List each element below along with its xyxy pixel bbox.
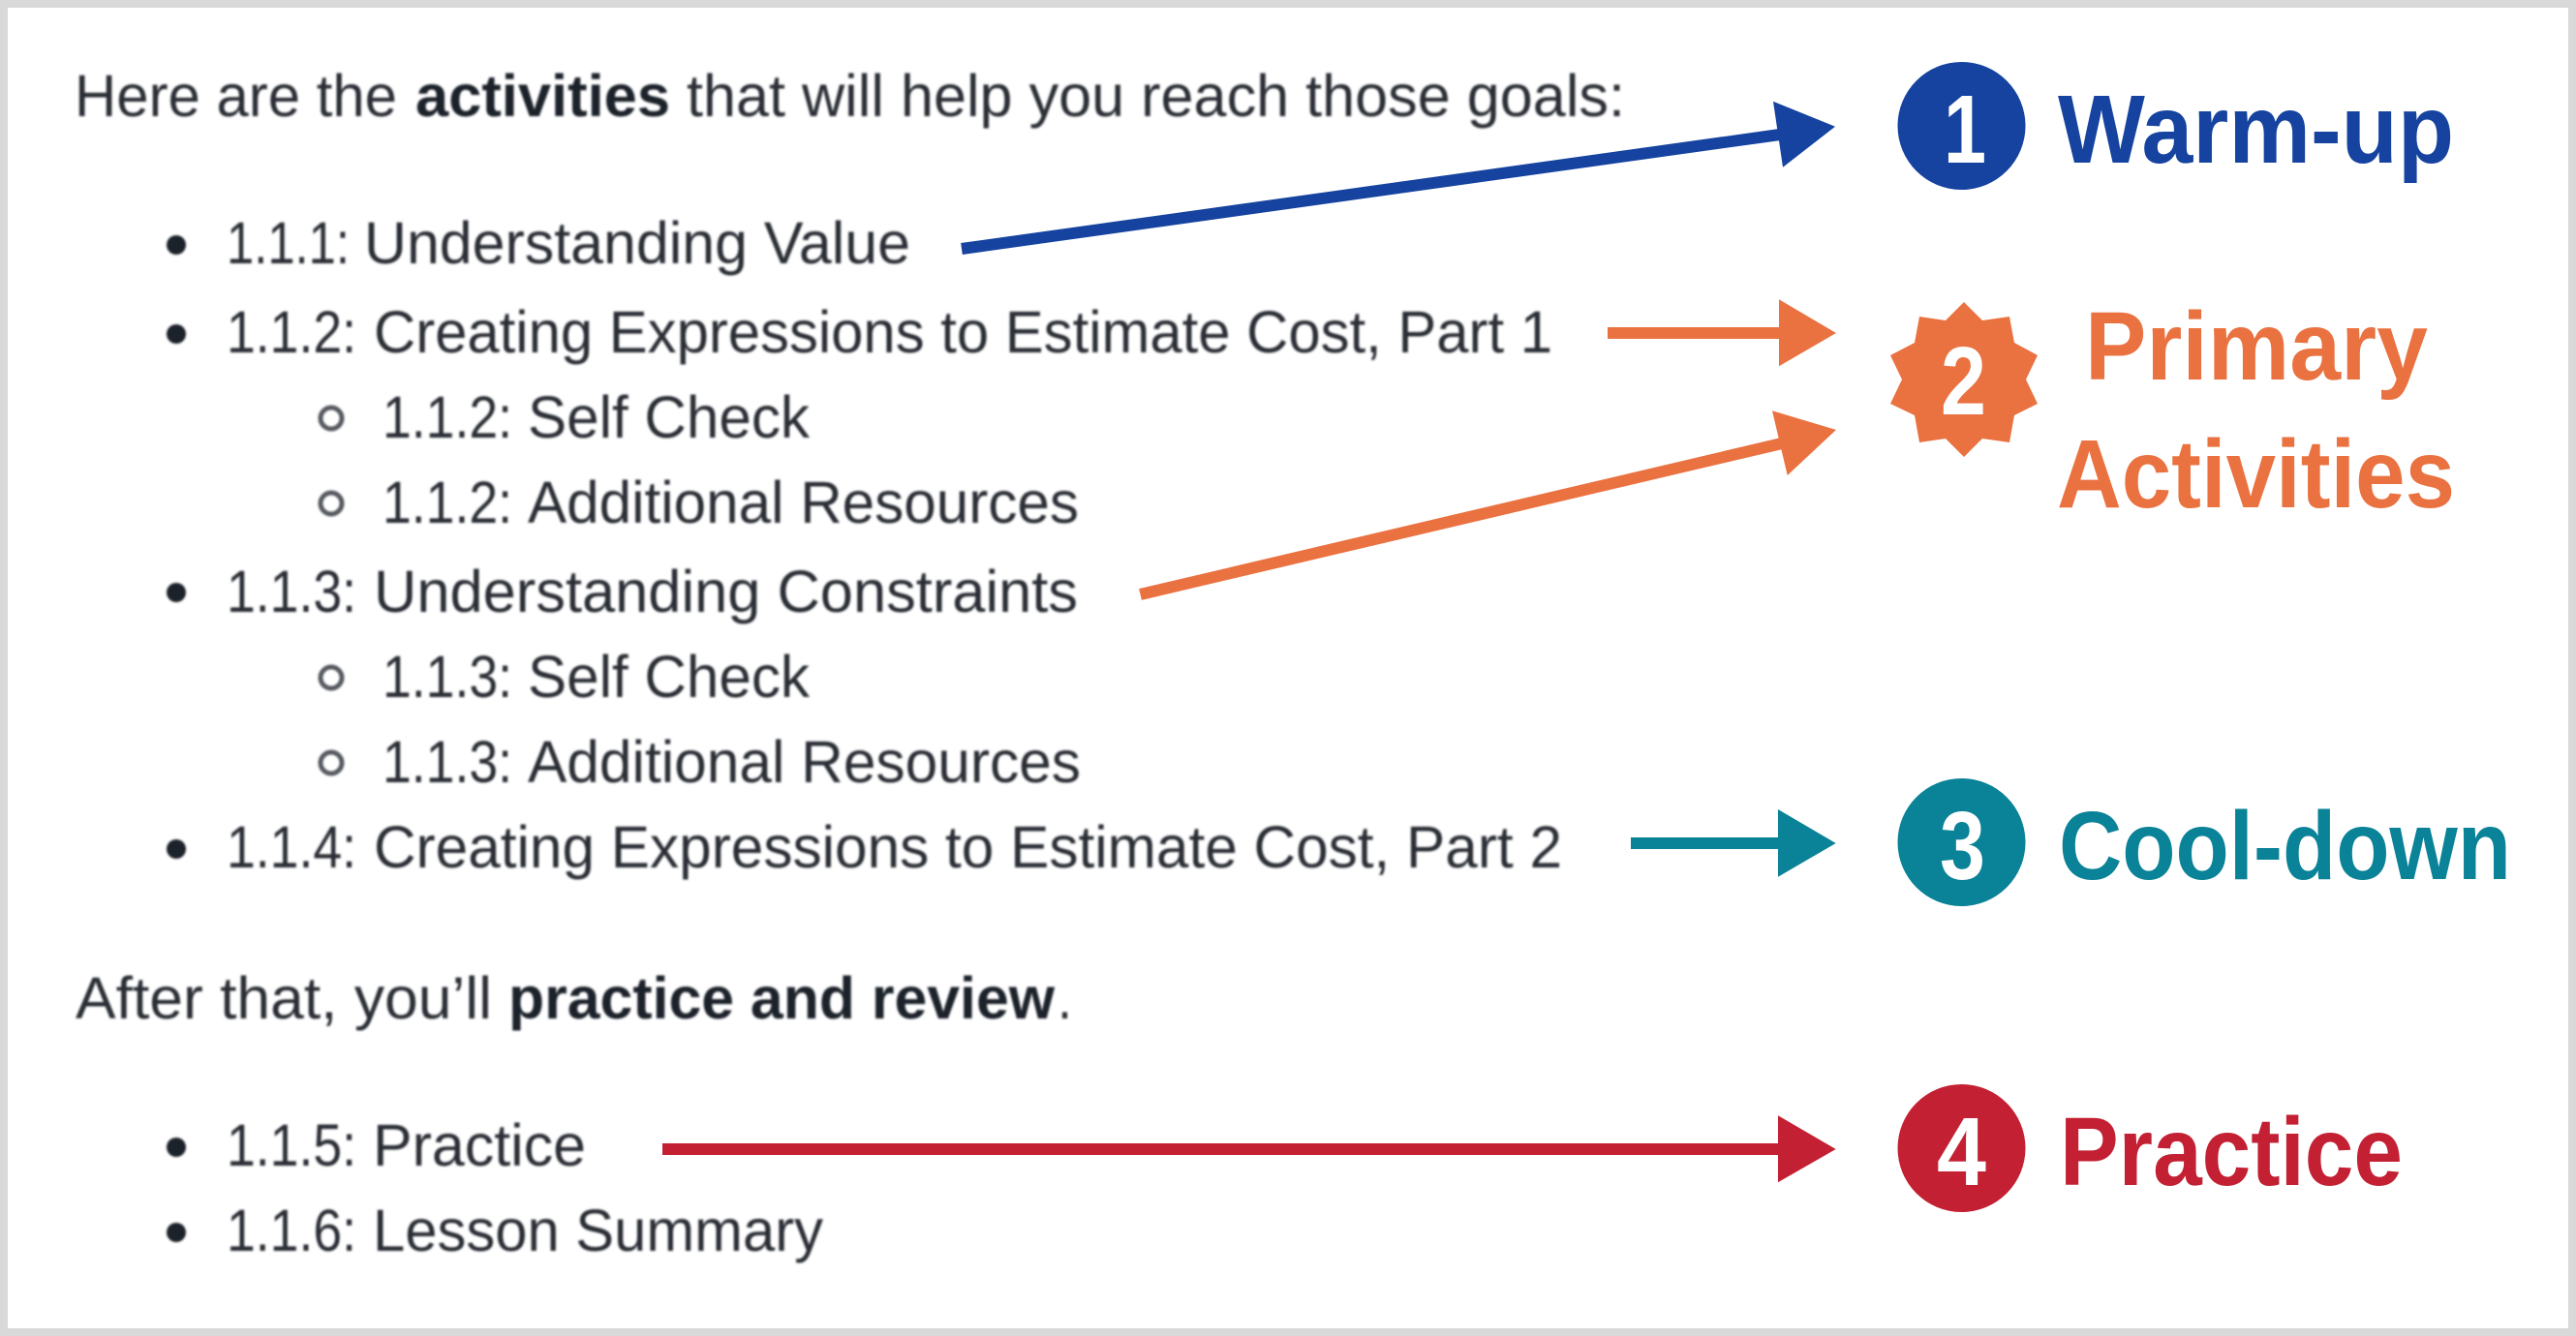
item 1.1.2: 1.1.2:	[227, 299, 356, 365]
item 1.1.6: 1.1.6:	[227, 1198, 356, 1263]
item 1.1.3 self check: Self Check	[528, 644, 810, 710]
item 1.1.3 self check	[321, 644, 810, 710]
arrow: 1.1.5 to practice	[662, 1115, 1836, 1182]
arrow: 1.1.1 to warm-up	[962, 102, 1835, 249]
item 1.1.3 additional resources: Additional Resources	[528, 729, 1081, 795]
item 1.1.1: 1.1.1:	[227, 210, 350, 276]
icon: number 1 circle	[1898, 62, 2026, 190]
item 1.1.6: Lesson Summary	[373, 1198, 823, 1263]
item 1.1.2: Creating Expressions to Estimate Cost, Part 1	[374, 299, 1552, 365]
item 1.1.2 additional resources: 1.1.2:	[383, 470, 512, 535]
item 1.1.5: 1.1.5:	[227, 1112, 356, 1178]
lesson activity text	[75, 63, 1625, 1263]
icon: number 3 circle: 3	[1940, 792, 1985, 900]
item 1.1.1: Understanding Value	[364, 210, 910, 276]
step 1: warm-up	[1898, 62, 2454, 190]
step 3: cool-down	[1898, 778, 2511, 906]
icon: number 4 circle: 4	[1937, 1098, 1986, 1206]
item 1.1.2 additional resources: Additional Resources	[528, 470, 1079, 535]
item 1.1.2 self check: 1.1.2:	[383, 384, 512, 450]
item 1.1.5: Practice	[373, 1112, 586, 1178]
item 1.1.5	[167, 1112, 586, 1178]
icon: number 1 circle: 1	[1944, 76, 1986, 184]
item 1.1.3: 1.1.3:	[227, 559, 356, 624]
practice sentence: practice and review	[508, 965, 1056, 1031]
icon: number 3 circle	[1898, 778, 2026, 906]
practice list	[167, 1112, 823, 1263]
label: cool-down: Cool-down	[2059, 792, 2511, 900]
icon: number 2 starburst: 2	[1941, 327, 1986, 436]
activity list	[167, 210, 1562, 880]
item 1.1.3 additional resources: 1.1.3:	[383, 729, 512, 795]
label: primary activities	[2057, 292, 2455, 529]
practice sentence	[76, 965, 1072, 1031]
intro sentence	[75, 63, 1625, 129]
label: practice: Practice	[2060, 1098, 2403, 1206]
icon: number 4 circle	[1898, 1084, 2026, 1212]
item 1.1.2 self check	[321, 384, 810, 450]
intro sentence: activities	[415, 63, 670, 129]
practice sentence: .	[1058, 965, 1072, 1031]
item 1.1.3: Understanding Constraints	[374, 559, 1078, 624]
arrow: 1.1.2 to primary activities	[1608, 299, 1836, 366]
step 4: practice	[1898, 1084, 2403, 1212]
step 2: primary activities	[1890, 292, 2455, 529]
arrow: 1.1.3 to primary activities	[1141, 410, 1836, 594]
practice sentence: After that, you’ll	[76, 965, 492, 1031]
item 1.1.4: Creating Expressions to Estimate Cost, Part 2	[374, 814, 1562, 880]
item 1.1.2 self check: Self Check	[528, 384, 810, 450]
label: primary activities: Primary	[2085, 292, 2428, 401]
label: warm-up: Warm-up	[2058, 76, 2454, 184]
item 1.1.6	[167, 1198, 823, 1263]
intro sentence: that will help you reach those goals:	[687, 63, 1625, 129]
icon: number 2 starburst	[1890, 302, 2038, 457]
item 1.1.4: 1.1.4:	[227, 814, 356, 880]
label: primary activities: Activities	[2057, 420, 2455, 529]
arrow: 1.1.4 to cool-down	[1631, 809, 1836, 877]
item 1.1.3 self check: 1.1.3:	[383, 644, 512, 710]
intro sentence: Here are the	[75, 63, 397, 129]
